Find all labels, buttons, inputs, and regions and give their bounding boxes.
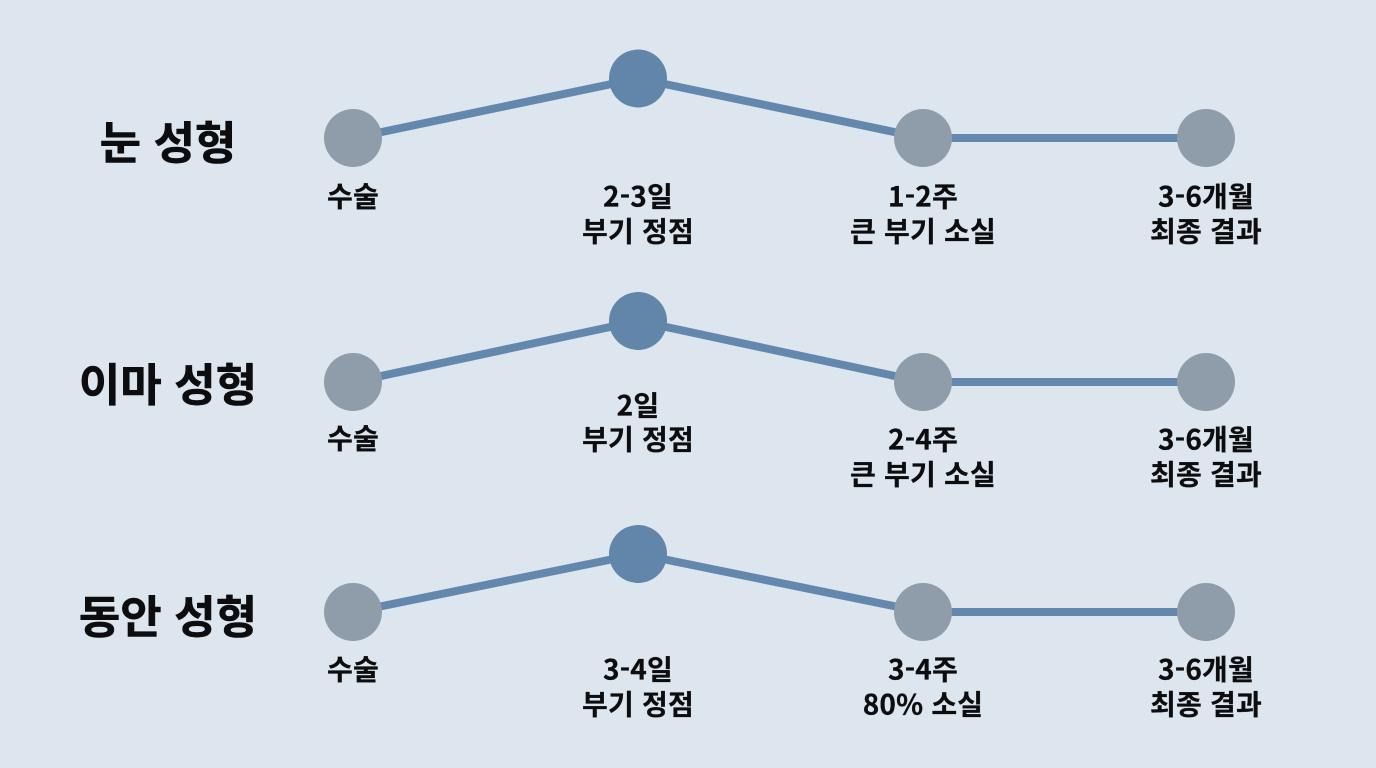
label: swelling peak: 부기 정점 [582, 684, 694, 724]
node: swelling peak [609, 525, 667, 583]
node: swelling peak [609, 50, 667, 108]
label: final result: 3-6개월 [1158, 648, 1254, 688]
timeline line [353, 321, 1206, 382]
label: final result: 최종 결과 [1150, 210, 1262, 250]
heading: forehead surgery: 이마 성형 [79, 349, 257, 414]
node: 80 percent gone [894, 583, 952, 641]
label: 80 percent gone: 80% 소실 [863, 684, 983, 724]
node: surgery [324, 353, 382, 411]
label: surgery: 수술 [327, 176, 379, 216]
node: major swelling gone [894, 353, 952, 411]
label: swelling peak: 부기 정점 [582, 210, 694, 250]
node: final result [1177, 109, 1235, 167]
label: 80 percent gone: 3-4주 [888, 648, 958, 688]
node: final result [1177, 583, 1235, 641]
label: surgery: 수술 [327, 418, 379, 458]
node: surgery [324, 109, 382, 167]
timeline line [353, 554, 1206, 612]
node: final result [1177, 353, 1235, 411]
label: swelling peak: 2일 [617, 384, 659, 424]
node: surgery [324, 583, 382, 641]
heading: eye surgery: 눈 성형 [100, 107, 236, 172]
label: swelling peak: 2-3일 [603, 176, 673, 216]
node: major swelling gone [894, 109, 952, 167]
label: major swelling gone: 2-4주 [888, 418, 958, 458]
label: swelling peak: 부기 정점 [582, 418, 694, 458]
node: swelling peak [609, 292, 667, 350]
row: forehead surgery [79, 292, 1262, 494]
row: eye surgery [100, 50, 1262, 250]
row: baby-face surgery [79, 525, 1262, 724]
label: final result: 3-6개월 [1158, 418, 1254, 458]
label: swelling peak: 3-4일 [603, 648, 673, 688]
label: final result: 최종 결과 [1150, 454, 1262, 494]
label: major swelling gone: 큰 부기 소실 [850, 210, 996, 250]
heading: baby-face surgery: 동안 성형 [79, 581, 257, 646]
timeline line [353, 78, 1206, 138]
label: surgery: 수술 [327, 648, 379, 688]
label: major swelling gone: 1-2주 [888, 176, 958, 216]
label: major swelling gone: 큰 부기 소실 [850, 454, 996, 494]
label: final result: 3-6개월 [1158, 176, 1254, 216]
label: final result: 최종 결과 [1150, 684, 1262, 724]
